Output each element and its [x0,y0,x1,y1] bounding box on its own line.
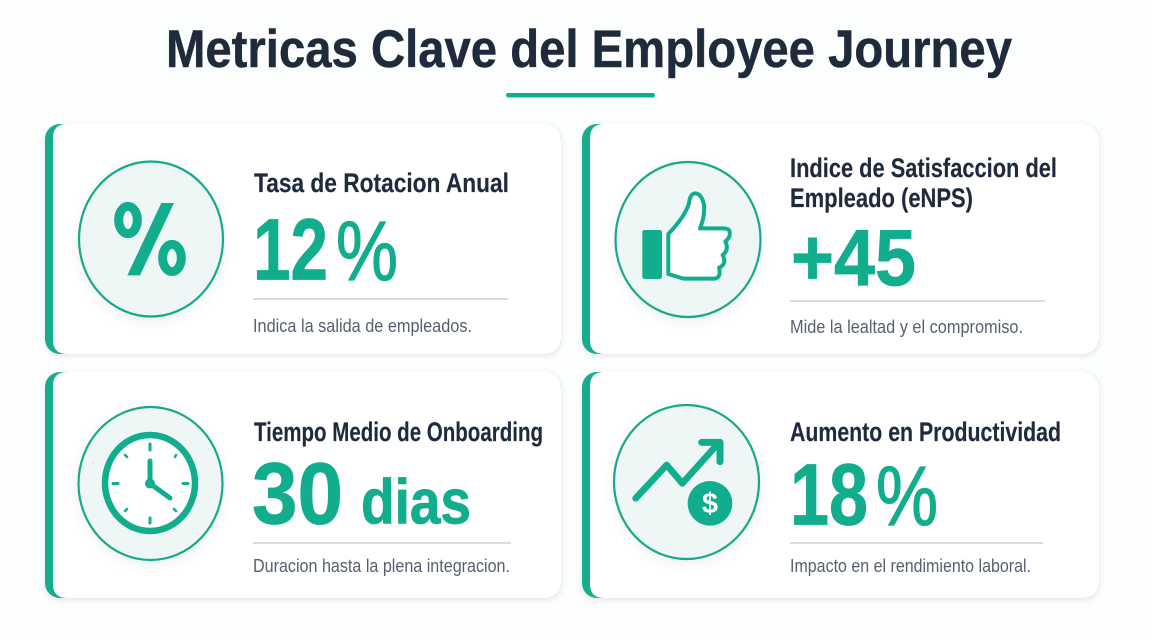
metric value [252,446,471,542]
icon: clock [78,407,222,560]
heading [790,153,1057,213]
metric value [253,202,398,298]
card background [45,124,561,354]
title: Metricas Clave del Employee Journey [166,20,1012,79]
description: Impacto en el rendimiento laboral. [790,556,1031,576]
card background [582,124,1099,354]
icon: percent [79,162,223,316]
icon: growth arrow and coin: $ [702,488,718,520]
panel: tasa de rotacion anual [45,124,561,354]
heading: Empleado (eNPS) [790,183,973,213]
metric value [790,446,938,544]
heading: Aumento en Productividad [790,417,1061,447]
metric value: % [336,204,398,298]
card background [582,372,1099,598]
metric value: dias [361,468,471,538]
panel: tiempo medio de onboarding [45,372,561,598]
panel: aumento en productividad [582,372,1099,598]
panel: indice de satisfaccion [582,124,1099,354]
title underline [506,93,655,98]
metric value: +45 [791,213,916,302]
description: Duracion hasta la plena integracion. [253,556,510,576]
metric value: 12 [253,202,328,298]
card background [45,372,561,598]
heading: Tasa de Rotacion Anual [254,168,509,198]
description: Mide la lealtad y el compromiso. [790,317,1023,337]
metric value: 18 [790,446,868,544]
heading: Indice de Satisfaccion del [790,153,1057,183]
icon: thumbs up [616,162,760,317]
icon: growth arrow and coin [614,405,759,559]
heading: Tiempo Medio de Onboarding [254,417,543,447]
description: Indica la salida de empleados. [253,316,472,336]
metric value: % [876,449,938,543]
metric value: 30 [252,446,343,542]
